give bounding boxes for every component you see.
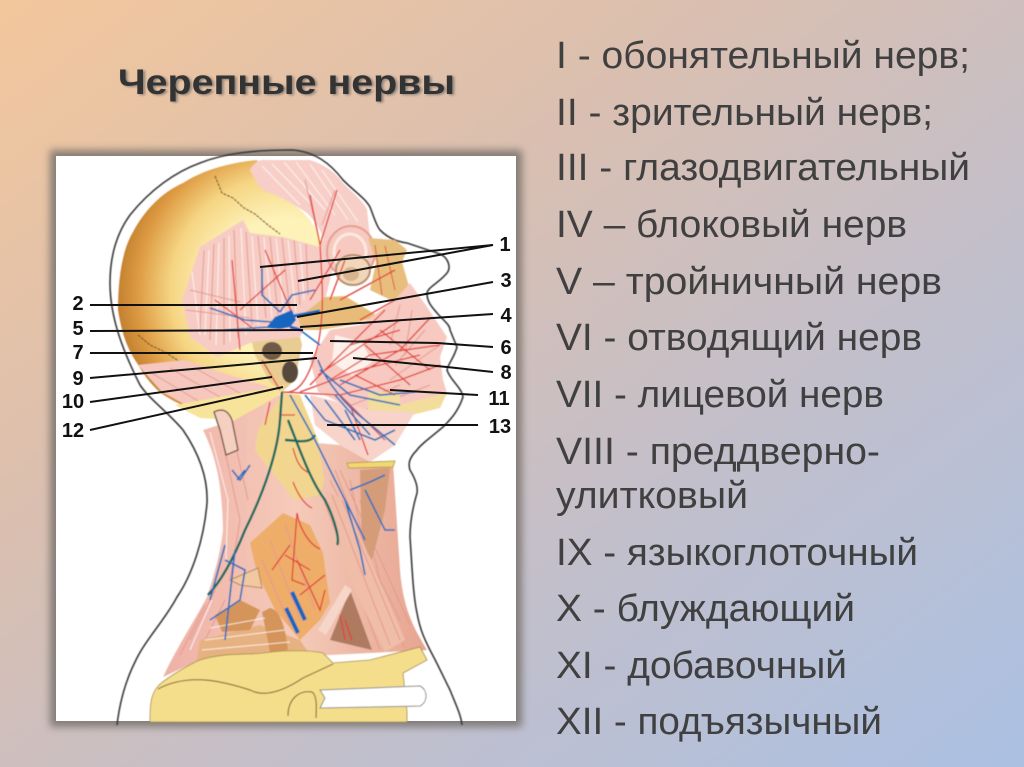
nerve list: IV – блоковый нерв [556, 204, 907, 246]
illustration panel [50, 150, 522, 727]
skull suture [138, 176, 280, 368]
ear bone [252, 337, 302, 392]
number labels: 12 [62, 420, 84, 442]
nerve list: XI - добавочный [556, 645, 847, 687]
clavicle shadow line [158, 664, 333, 693]
brown triangle [330, 590, 372, 650]
ear opening [262, 342, 282, 360]
number labels: 4 [500, 305, 512, 327]
neck muscles [163, 393, 427, 677]
nerve list: X - блуждающий [556, 588, 855, 630]
white rib [320, 686, 426, 708]
nerve list: II - зрительный нерв; [556, 92, 933, 134]
nerve list: VIII - преддверно- [556, 431, 880, 473]
nerve list: IX - языкоглоточный [556, 532, 918, 574]
leader lines [90, 245, 493, 430]
head silhouette [110, 150, 463, 725]
vertebrae upper [255, 393, 324, 500]
number labels: 5 [72, 318, 84, 340]
muscle: forehead [250, 160, 370, 243]
panel shadow [50, 150, 522, 727]
number labels: 7 [72, 342, 84, 364]
arteries [215, 190, 440, 640]
blue nerves [210, 268, 415, 640]
number labels: 1 [499, 234, 511, 256]
number labels: 9 [72, 368, 84, 390]
cheek bone [298, 296, 378, 330]
number labels: 13 [489, 416, 511, 438]
panel: white card [56, 156, 516, 721]
tan strap muscle [360, 468, 390, 560]
anatomy drawing [110, 150, 463, 725]
skull bone [118, 160, 325, 413]
number labels: 11 [488, 388, 510, 410]
muscle: face [310, 283, 447, 413]
muscle: upper neck [310, 395, 415, 462]
orbital ring [327, 226, 375, 278]
number labels: 10 [62, 391, 84, 413]
nose bone [368, 238, 410, 302]
nerve list: I - обонятельный нерв; [556, 35, 970, 77]
title: Черепные нервы [120, 64, 457, 103]
green nerves [208, 392, 338, 595]
occipital muscle [138, 360, 285, 410]
hyoid [347, 461, 395, 468]
rib strips [195, 625, 310, 668]
rib knob [288, 692, 316, 718]
right neck band [325, 490, 405, 652]
number labels: 2 [72, 293, 84, 315]
muscle: temporal [182, 220, 335, 357]
nerve list: VII - лицевой нерв [556, 374, 884, 416]
nerve list [556, 35, 970, 743]
title: Черепные нервы [118, 63, 455, 102]
number labels [62, 234, 512, 442]
number labels: 6 [500, 337, 512, 359]
nerve list: V – тройничный нерв [556, 261, 942, 303]
number labels: 3 [500, 270, 512, 292]
jaw bone [368, 392, 447, 418]
nerve list: XII - подъязычный [556, 701, 882, 743]
nerve list: VI - отводящий нерв [556, 317, 922, 359]
nerve list: III - глазодвигательный [556, 147, 970, 189]
clavicle and chest [150, 647, 427, 722]
mastoid yellow [175, 385, 285, 420]
number labels: 8 [500, 362, 512, 384]
spine orange [250, 513, 330, 640]
nerve list: улитковый [556, 475, 748, 517]
